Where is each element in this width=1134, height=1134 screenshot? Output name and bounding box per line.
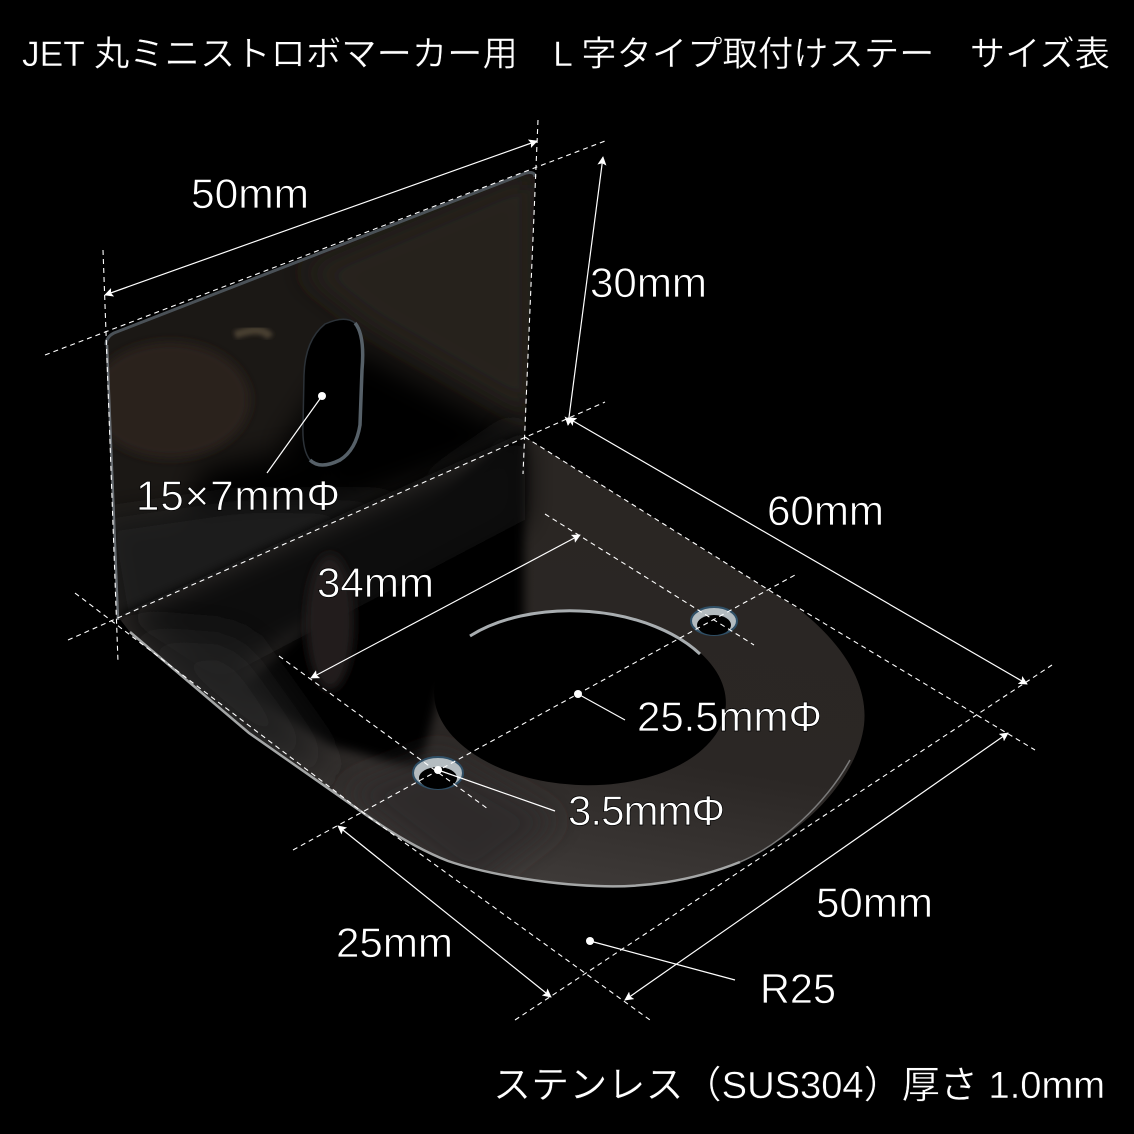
slot hole <box>303 319 363 465</box>
label: 60mm: 60mm <box>767 487 884 534</box>
leader: screw hole <box>434 766 555 811</box>
dimension arrow: top 50mm <box>105 141 537 295</box>
label: top 50mm: 50mm <box>191 170 309 217</box>
label: 30mm: 30mm <box>590 259 707 306</box>
leader: slot <box>267 392 326 473</box>
bracket vertical plate <box>90 170 535 640</box>
center hole <box>430 603 730 793</box>
label: screw hole size: 3.5mmΦ <box>568 787 725 834</box>
leader: R25 <box>586 937 735 980</box>
dimension arrow: 30mm <box>568 157 603 425</box>
label: 25mm: 25mm <box>336 919 453 966</box>
title: JET 丸ミニストロボマーカー用 L 字タイプ取付けステー サイズ表 <box>22 35 1110 74</box>
label: R25: R25 <box>760 965 836 1012</box>
label: 34mm: 34mm <box>317 559 434 606</box>
screw hole left <box>413 757 463 789</box>
dimension arrow: right 50mm <box>625 733 1008 1000</box>
material note: ステンレス（SUS304）厚さ 1.0mm <box>493 1065 1105 1107</box>
label: right 50mm: 50mm <box>816 879 933 926</box>
dashed guide lines <box>45 120 1052 1020</box>
leader: center hole <box>574 690 625 720</box>
dimension arrow: 25mm <box>338 826 551 997</box>
dimension arrow: 34mm <box>311 535 580 678</box>
label: center hole size: 25.5mmΦ <box>637 693 822 740</box>
dimension arrow: 60mm <box>568 418 1027 684</box>
label: slot size: 15×7mmΦ <box>136 472 340 519</box>
bracket horizontal plate <box>110 420 865 890</box>
screw hole right <box>691 607 737 635</box>
